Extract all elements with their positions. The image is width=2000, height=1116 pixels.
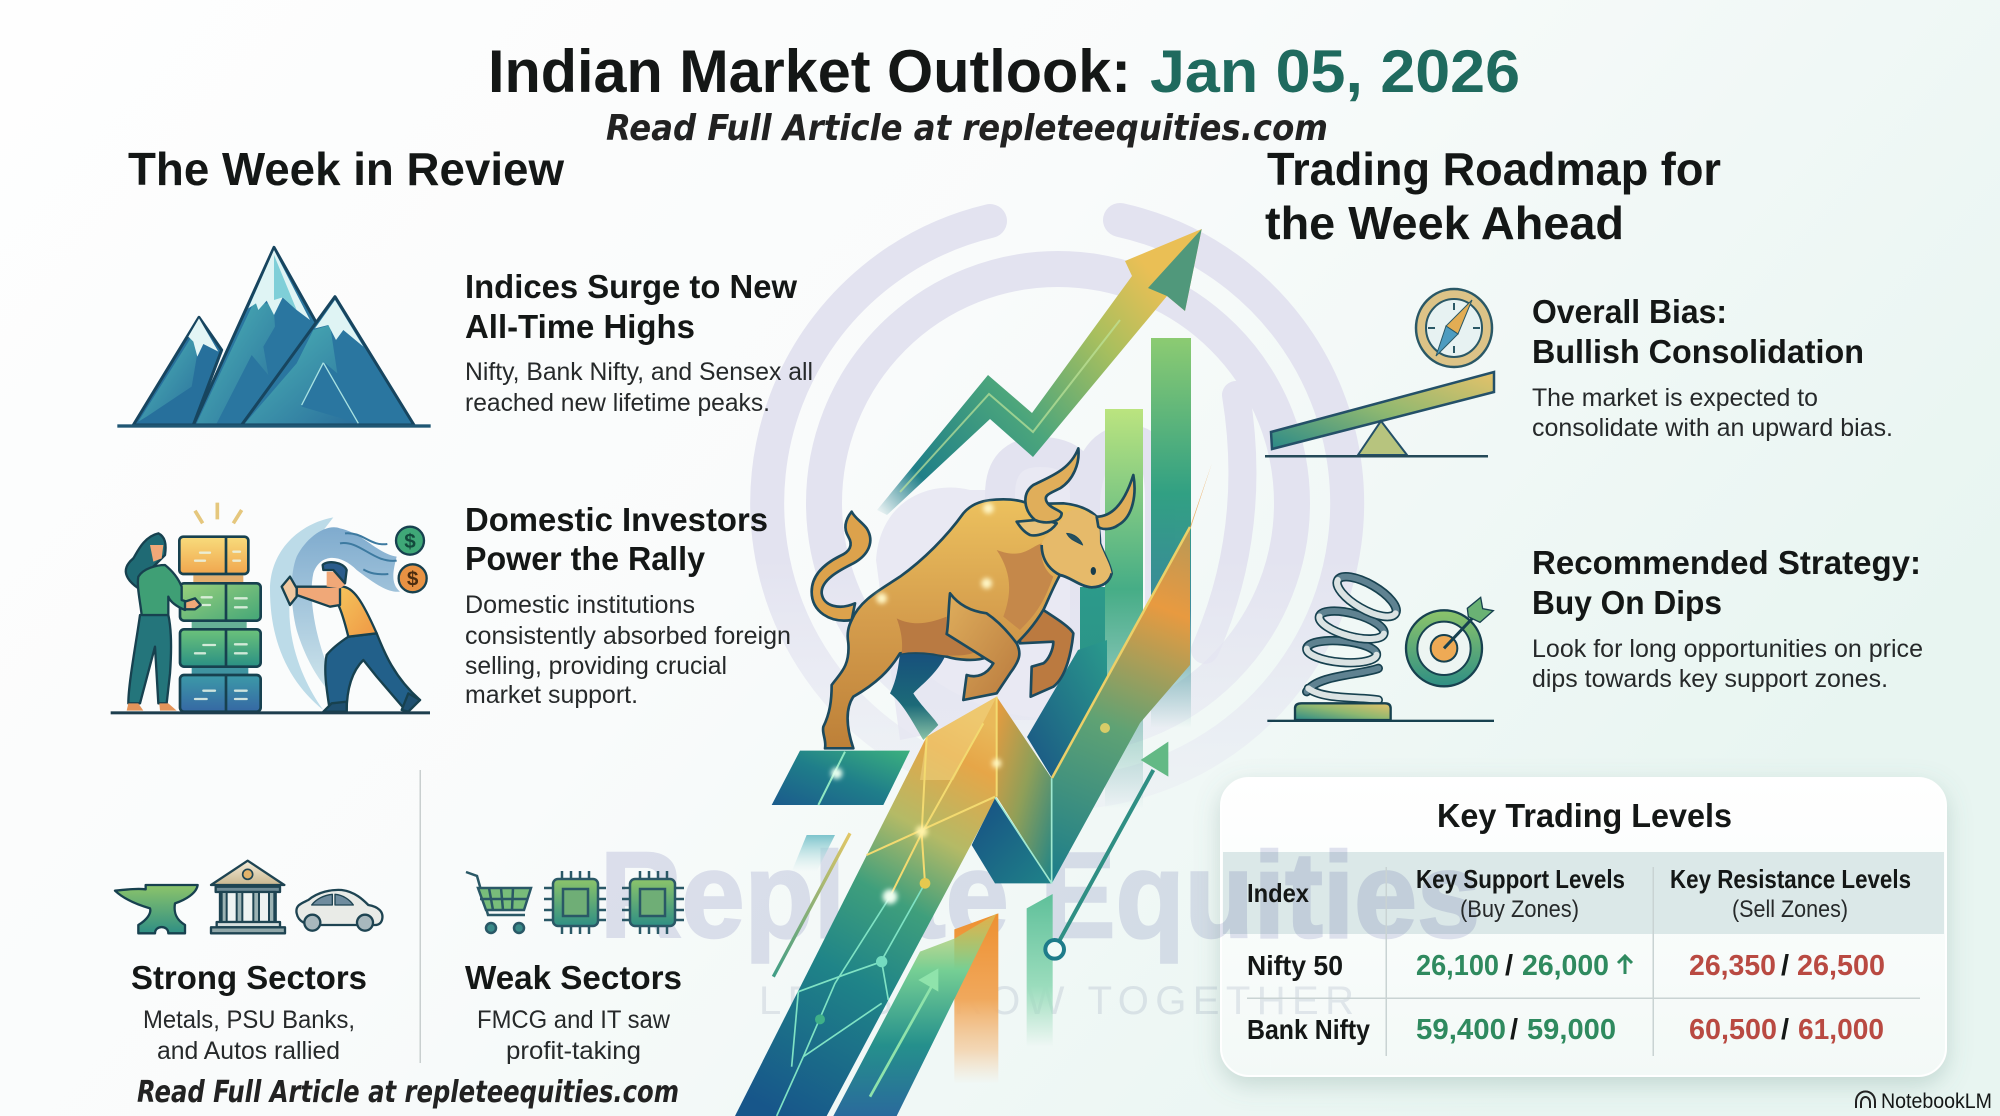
row: bank nifty: 59,400 bbox=[1416, 1014, 1506, 1046]
spring coils bbox=[1306, 569, 1402, 700]
block: recommended strategy: Buy On Dips bbox=[1532, 584, 1722, 621]
body glints bbox=[876, 503, 994, 604]
right horn bbox=[1097, 475, 1135, 529]
row: bank nifty: / bbox=[1781, 1014, 1789, 1046]
block: strong sectors: Metals, PSU Banks, bbox=[143, 1006, 355, 1034]
divider bbox=[420, 770, 421, 1063]
target bbox=[1406, 597, 1493, 686]
belly shading bbox=[897, 617, 977, 656]
table header: Key Support Levels bbox=[1416, 864, 1625, 894]
block: domestic investors: Power the Rally bbox=[465, 540, 706, 577]
anvil bbox=[115, 885, 198, 933]
block: overall bias: Bullish Consolidation bbox=[1532, 333, 1864, 370]
woman bbox=[126, 533, 201, 711]
table header: Key Resistance Levels bbox=[1670, 864, 1911, 894]
row: bank nifty: / bbox=[1510, 1014, 1518, 1046]
small green arrow with node bbox=[1045, 742, 1168, 959]
block: domestic investors: Domestic institutions bbox=[465, 591, 695, 619]
row: bank nifty bbox=[1247, 1014, 1884, 1046]
icon: compass on seesaw bbox=[1265, 289, 1494, 458]
block: indices surge: All-Time Highs bbox=[465, 308, 695, 345]
block: domestic investors: consistently absorbed foreign bbox=[465, 622, 791, 650]
row: bank nifty: 60,500 bbox=[1689, 1014, 1777, 1046]
watermark text: Replete Equities bbox=[600, 827, 1480, 963]
watermark text: LET'S GROW TOGETHER bbox=[759, 979, 1354, 1023]
heading: trading roadmap: the Week Ahead bbox=[1265, 197, 1624, 249]
body bbox=[823, 499, 1112, 748]
man bbox=[282, 562, 420, 712]
wave swoosh bbox=[270, 517, 400, 710]
block: overall bias bbox=[1532, 293, 1893, 442]
watermark text bbox=[600, 827, 1480, 1023]
top article link: Read Full Article at repleteequities.com bbox=[606, 108, 1328, 149]
block: weak sectors: Weak Sectors bbox=[465, 959, 682, 996]
panel: key trading levels table bbox=[1247, 797, 1920, 1056]
icon: chip two bbox=[622, 871, 684, 934]
orange and green lower bars bbox=[954, 894, 1053, 1083]
right rising band of zigzag bbox=[1052, 463, 1212, 883]
far front leg bbox=[1020, 610, 1073, 697]
block: recommended strategy: Look for long opportunities on price bbox=[1532, 635, 1923, 663]
block: recommended strategy: Recommended Strategy: bbox=[1532, 544, 1921, 581]
title: Indian Market Outlook: bbox=[488, 38, 1131, 105]
head bbox=[1042, 510, 1112, 587]
icon: chip one bbox=[544, 871, 606, 934]
table title: Key Trading Levels bbox=[1437, 797, 1732, 834]
second lower band with inner arrow bbox=[833, 913, 997, 1116]
block: weak sectors: profit-taking bbox=[506, 1037, 641, 1065]
chest shading bbox=[997, 543, 1053, 630]
dark hind leg bbox=[890, 653, 945, 740]
block: weak sectors bbox=[465, 959, 682, 1065]
icon: mountains bbox=[117, 247, 431, 428]
block: weak sectors: FMCG and IT saw bbox=[477, 1006, 671, 1034]
block: domestic investors: selling, providing crucial bbox=[465, 652, 727, 680]
block: indices surge: reached new lifetime peaks. bbox=[465, 389, 770, 417]
upper trend arrow bbox=[877, 229, 1202, 515]
title: Jan 05, 2026 bbox=[1150, 38, 1520, 105]
ear bbox=[1017, 519, 1057, 535]
block: domestic investors: market support. bbox=[465, 681, 638, 709]
green coin bbox=[396, 527, 424, 555]
green coin: $ bbox=[404, 530, 416, 553]
stacked blocks bbox=[179, 537, 261, 712]
block: indices surge: Indices Surge to New bbox=[465, 268, 797, 305]
left slivers bbox=[773, 833, 850, 977]
block: strong sectors bbox=[131, 959, 367, 1065]
block: overall bias: The market is expected to bbox=[1532, 384, 1818, 412]
row: nifty 50: 26,500 bbox=[1797, 950, 1885, 982]
row: bank nifty: 61,000 bbox=[1798, 1014, 1884, 1046]
block: strong sectors: and Autos rallied bbox=[157, 1037, 340, 1065]
block: overall bias: consolidate with an upward bias. bbox=[1532, 414, 1893, 442]
row: nifty 50: 26,000 bbox=[1522, 950, 1609, 982]
row: nifty 50: / bbox=[1505, 950, 1513, 982]
row: bank nifty: Bank Nifty bbox=[1247, 1014, 1370, 1045]
rising bars bbox=[1080, 338, 1191, 809]
row: nifty 50: / bbox=[1781, 950, 1789, 982]
table header bbox=[1247, 864, 1911, 923]
near front leg bbox=[947, 593, 1019, 700]
block: indices surge bbox=[465, 268, 813, 417]
block: strong sectors: Strong Sectors bbox=[131, 959, 367, 996]
heading: trading roadmap bbox=[1265, 143, 1721, 249]
left horn bbox=[1025, 448, 1079, 522]
block: overall bias: Overall Bias: bbox=[1532, 293, 1727, 330]
card background for levels bbox=[1221, 778, 1946, 1076]
row: nifty 50: 26,350 bbox=[1689, 950, 1776, 982]
heading: trading roadmap: Trading Roadmap for bbox=[1267, 143, 1721, 195]
rays bbox=[195, 503, 242, 523]
car bbox=[296, 890, 382, 931]
icon: spring and target bbox=[1267, 569, 1494, 722]
bottom article link: Read Full Article at repleteequities.com bbox=[137, 1075, 679, 1110]
block: domestic investors bbox=[465, 501, 791, 709]
bull bbox=[812, 448, 1135, 748]
bank bbox=[211, 861, 285, 933]
table header: (Sell Zones) bbox=[1732, 896, 1848, 923]
icon: investors holding stack against wave bbox=[111, 503, 430, 714]
block: domestic investors: Domestic Investors bbox=[465, 501, 768, 538]
central rising chart illustration bbox=[735, 229, 1212, 1116]
row: nifty 50: 26,100 bbox=[1416, 950, 1499, 982]
block: recommended strategy: dips towards key support zones. bbox=[1532, 665, 1888, 693]
dark teal wedge behind zigzag bbox=[1027, 640, 1107, 778]
table header: Index bbox=[1247, 878, 1309, 908]
row: nifty 50: Nifty 50 bbox=[1247, 950, 1343, 981]
heading: week in review: The Week in Review bbox=[128, 143, 564, 195]
main ascending band bbox=[735, 697, 1052, 1116]
title bbox=[488, 38, 1520, 105]
row: nifty 50 bbox=[1247, 950, 1885, 982]
lower zigzag detail in reference coordinates bbox=[735, 697, 1168, 1116]
eye and nose bbox=[1067, 533, 1096, 575]
block: recommended strategy bbox=[1532, 544, 1923, 693]
orange coin bbox=[399, 564, 427, 592]
orange coin: $ bbox=[407, 568, 419, 591]
icon: cart bbox=[466, 872, 531, 933]
watermark logo rings bbox=[767, 220, 1347, 793]
block: indices surge: Nifty, Bank Nifty, and Sensex all bbox=[465, 358, 813, 386]
bull platform bbox=[772, 751, 910, 805]
table header: (Buy Zones) bbox=[1460, 896, 1579, 923]
tail bbox=[812, 512, 870, 621]
row: bank nifty: 59,000 bbox=[1527, 1014, 1616, 1046]
notebooklm badge: NotebookLM bbox=[1881, 1090, 1992, 1113]
icons: strong sectors row bbox=[115, 861, 382, 933]
